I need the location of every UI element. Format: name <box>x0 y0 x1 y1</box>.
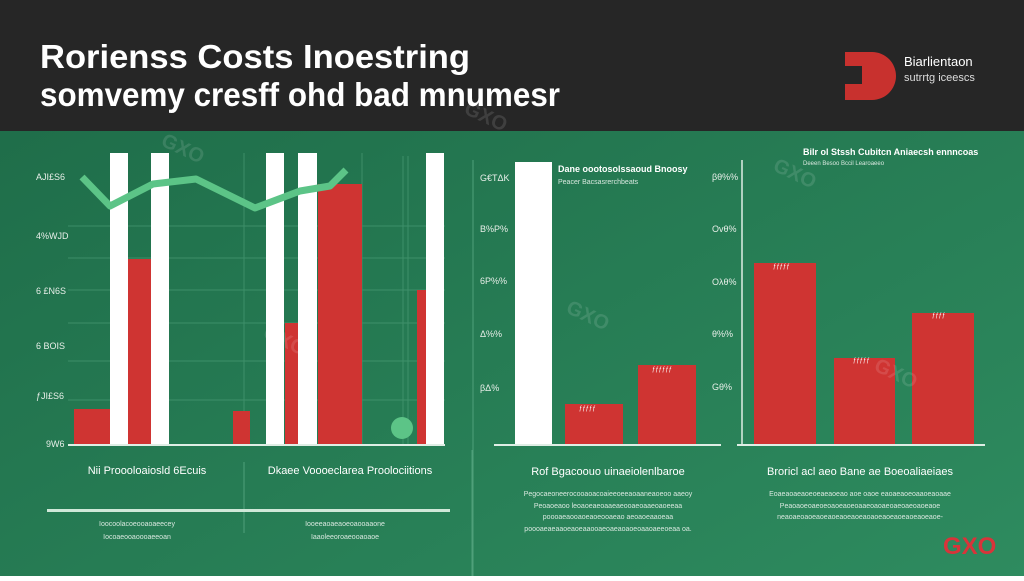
bottom captions right: Broricl acl aeo Bane ae Boeoaliaeiaes <box>767 466 953 478</box>
panel: right bar chart <box>712 147 985 446</box>
bottom captions right: Eoaeaoaeaoeoeaeaoeao aoe oaoe eaoaeaoeoaaoeaoaae <box>769 491 951 498</box>
bottom captions right: poooaeaooaoeaoeooaeao aeoaoeaaoeaa <box>543 514 673 521</box>
watermarks: GXO <box>770 155 819 193</box>
bottom captions right: Peaoaoeoaeoeoaoeaoeoaaeoaoaeoaeoaeoaoeaoe <box>780 503 940 510</box>
panel: middle bar chart <box>473 160 721 576</box>
panel: right bar chart: Oλθ% <box>712 277 737 287</box>
panel: left combo chart: AJI£S6 <box>36 172 65 182</box>
panel: middle bar chart: ƒƒƒƒƒƒ <box>652 367 672 373</box>
bottom captions right: Rof Bgacoouo uinaeiolenlbaroe <box>531 466 685 478</box>
bottom captions right: neaoaeoaoeaoeaoeaoeaoeaoaoeaoeaoeaoeaoeaoe- <box>777 514 944 521</box>
watermarks: GXO <box>260 322 309 360</box>
panel: left combo chart <box>36 153 445 449</box>
bottom captions right: Pegocaeoneerocooaoacoaieeoeeaoaaneaoeoo aaeoy <box>524 491 693 498</box>
watermarks: GXO <box>158 130 207 168</box>
bottom captions left: Iocoaeooaoooaeeoan <box>103 534 171 541</box>
panel: left combo chart: 6 £N6S <box>36 286 66 296</box>
watermarks: GXO <box>461 98 510 136</box>
panel: right bar chart: Deeen Besoo Bccil Learoaeeo <box>803 161 885 167</box>
panel: left combo chart: 6 BOIS <box>36 341 65 351</box>
bottom captions left: Iaaoleeoroaeooaoaoe <box>311 534 379 541</box>
panel: middle bar chart: Peacer Bacsasrerchbeats <box>558 179 639 186</box>
panel: middle bar chart: Δ%% <box>480 329 502 339</box>
bottom captions left: Iooeeaoaeaoeoaooaaone <box>305 521 385 528</box>
panel: left combo chart: 9W6 <box>46 439 65 449</box>
panel: right bar chart: Bilr ol Stssh Cubitcn Aniaecsh ennncoas <box>803 147 978 157</box>
logo: sutrrtg iceescs <box>904 72 975 84</box>
panel: right bar chart: βθ%% <box>712 172 738 182</box>
title: somvemy cresff ohd bad mnumesr <box>40 76 560 113</box>
logo <box>845 52 975 100</box>
bottom captions right: poooaeaeaaoeaoeaaooaeoaeaoaoeoaaoaeeoeaa oa. <box>524 526 692 533</box>
panel: right bar chart: ƒƒƒƒ <box>932 313 945 319</box>
panel: right bar chart: ƒƒƒƒƒ <box>773 264 790 270</box>
panel: left combo chart: ƒJI£S6 <box>36 391 64 401</box>
bottom captions left <box>47 462 450 541</box>
panel: middle bar chart: Dane oootosolssaoud Bnoosy <box>558 164 688 174</box>
panel: left combo chart: 4%WJD <box>36 231 69 241</box>
panel: middle bar chart: B%P% <box>480 224 508 234</box>
panel: right bar chart: ƒƒƒƒƒ <box>853 358 870 364</box>
panel: right bar chart: Gθ% <box>712 382 732 392</box>
panel: right bar chart: Ovθ% <box>712 224 737 234</box>
bottom captions left: Ioocoolacoeooaoaeecey <box>99 521 175 528</box>
header bar <box>0 0 1024 131</box>
panel: middle bar chart: ƒƒƒƒƒ <box>579 406 596 412</box>
logo text: GXO: GXO <box>943 533 996 560</box>
bottom captions right <box>524 466 953 533</box>
trend line <box>82 170 346 208</box>
watermarks: GXO <box>871 355 920 393</box>
panel: right bar chart: θ%% <box>712 329 733 339</box>
bottom captions right: Peoaoeaoo leoaoeaeoaaeaeooaeoaaeoaoeeaa <box>534 503 682 510</box>
title: Rorienss Costs Inoestring <box>40 38 470 75</box>
bottom captions left: Dkaee Voooeclarea Proolociitions <box>268 465 433 477</box>
panel: middle bar chart: 6P%% <box>480 276 507 286</box>
panel: middle bar chart: βΔ% <box>480 383 499 393</box>
bottom captions left: Nii Proooloaiosld 6Ecuis <box>88 465 207 477</box>
title <box>40 38 560 113</box>
logo: Biarlientaon <box>904 54 973 69</box>
watermarks: GXO <box>563 297 612 335</box>
panel: middle bar chart: G€TΔK <box>480 173 510 183</box>
watermarks <box>158 98 920 393</box>
